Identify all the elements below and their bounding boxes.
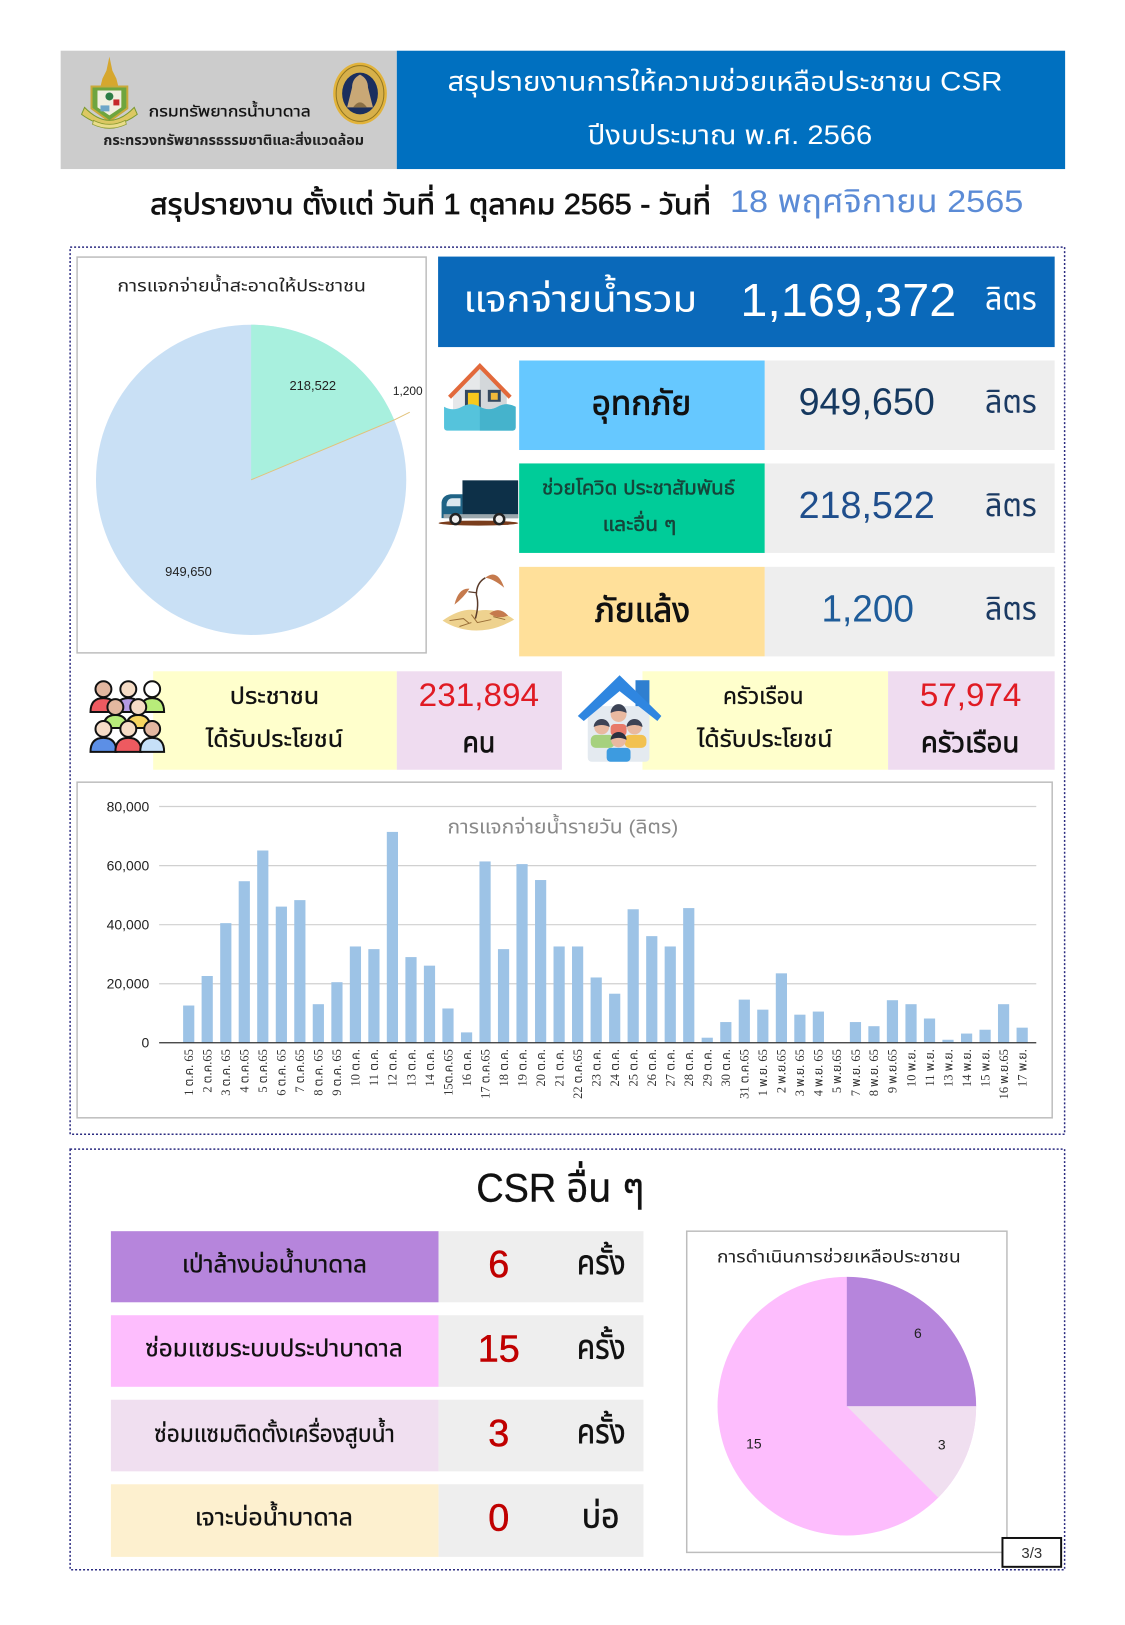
y axis grid and labels: 20,000	[107, 976, 149, 992]
table row: well flushing	[111, 1231, 643, 1302]
icon: dry plant on cracked soil	[443, 574, 514, 630]
header title panel: ปีงบประมาณ พ.ศ. 2566	[588, 120, 872, 150]
page number badge: 3/3	[1021, 1546, 1042, 1562]
row: flood: ลิตร	[985, 384, 1037, 420]
stat: people benefited: คน	[462, 727, 495, 759]
y axis grid and labels: 0	[141, 1035, 149, 1051]
row: covid and public relations: และอื่น ๆ	[603, 510, 676, 536]
report period subtitle: สรุปรายงาน ตั้งแต่ วันที่ 1 ตุลาคม 2565 - วันที่	[150, 184, 711, 221]
row: drought	[443, 567, 1055, 656]
x axis date labels: 22 ต.ค.65	[571, 1049, 585, 1099]
stat: people benefited: 231,894	[419, 676, 539, 713]
x axis date labels: 14 ต.ค.	[423, 1049, 437, 1086]
report period subtitle: 18 พฤศจิกายน 2565	[730, 183, 1023, 219]
row: drought: ภัยแล้ง	[595, 592, 690, 630]
y axis grid and labels	[107, 799, 1036, 1051]
x axis date labels: 17 ต.ค.65	[478, 1049, 492, 1099]
table row: groundwater supply repair	[111, 1315, 643, 1387]
heading: other CSR: CSR อื่น ๆ	[476, 1160, 644, 1210]
x axis date labels: 1 ต.ค. 65	[182, 1049, 196, 1096]
stat: people benefited: ได้รับประโยชน์	[205, 726, 343, 752]
y axis grid and labels: 60,000	[107, 858, 149, 874]
row: covid and public relations: ช่วยโควิด ประชาสัมพันธ์	[542, 476, 735, 499]
row: covid and public relations	[439, 463, 1055, 553]
x axis date labels: 3 ต.ค. 65	[219, 1049, 233, 1096]
y axis grid and labels: 40,000	[107, 917, 149, 933]
x axis date labels: 16 พ.ย.65	[997, 1049, 1011, 1099]
table row: pump repair and installation: 3	[488, 1413, 509, 1455]
table row: pump repair and installation: ครั้ง	[577, 1410, 626, 1451]
pie chart: assistance operations: 3	[938, 1436, 946, 1452]
table row: well drilling: บ่อ	[582, 1498, 620, 1536]
icon: group of people	[91, 681, 164, 752]
row: flood: 949,650	[799, 382, 935, 424]
x axis date labels: 18 ต.ค.	[497, 1049, 511, 1086]
stat: households benefited	[578, 671, 1055, 770]
pie chart: assistance operations: การดำเนินการช่วยเหลือประชาชน	[717, 1248, 961, 1267]
table row: groundwater supply repair: ซ่อมแซมระบบประปาบาดาล	[145, 1335, 403, 1362]
x axis date labels	[182, 1049, 1029, 1099]
page number badge	[1002, 1538, 1061, 1567]
panel: other CSR frame	[70, 1149, 1065, 1570]
x axis date labels: 6 ต.ค. 65	[275, 1049, 289, 1096]
row: flood: อุทกภัย	[592, 385, 691, 424]
x axis date labels: 5 พ.ย.65	[830, 1049, 844, 1093]
row: drought: ลิตร	[985, 591, 1037, 627]
panel: water distribution frame	[70, 247, 1065, 1134]
stat: people benefited	[91, 671, 562, 770]
x axis date labels: 7 พ.ย. 65	[849, 1049, 863, 1096]
x axis date labels: 12 ต.ค.	[386, 1049, 400, 1086]
department name: กรมทรัพยากรน้ำบาดาล	[149, 100, 311, 120]
header title panel: สรุปรายงานการให้ความช่วยเหลือประชาชน CSR	[448, 66, 1002, 97]
pie chart: assistance operations	[687, 1231, 1007, 1552]
x axis date labels: 8 พ.ย. 65	[867, 1049, 881, 1096]
x axis date labels: 27 ต.ค.	[664, 1049, 678, 1086]
header title panel	[397, 51, 1065, 169]
chart title: การแจกจ่ายน้ำรายวัน (ลิตร)	[448, 813, 678, 838]
table row: pump repair and installation	[111, 1400, 643, 1471]
x axis date labels: 10 ต.ค.	[349, 1049, 363, 1086]
pie chart: assistance operations: 6	[914, 1325, 922, 1341]
total water banner: ลิตร	[985, 280, 1037, 316]
x axis date labels: 24 ต.ค.	[608, 1049, 622, 1086]
pie chart: clean water distribution	[77, 257, 426, 653]
icon: department crest	[82, 57, 137, 128]
stat: households benefited: ได้รับประโยชน์	[696, 726, 832, 752]
header banner	[61, 51, 1065, 169]
x axis date labels: 29 ต.ค.	[701, 1049, 715, 1086]
x axis date labels: 31 ต.ค.65	[738, 1049, 752, 1099]
x axis date labels: 2 ต.ค.65	[200, 1049, 215, 1093]
x axis date labels: 30 ต.ค.	[719, 1049, 733, 1086]
x axis date labels: 13 ต.ค.	[404, 1049, 418, 1086]
row: covid and public relations: ลิตร	[985, 487, 1037, 523]
table row: groundwater supply repair: ครั้ง	[577, 1325, 626, 1366]
stat: households benefited: ครัวเรือน	[723, 683, 804, 709]
x axis date labels: 11 ต.ค.	[367, 1049, 381, 1086]
ministry name: กระทรวงทรัพยากรธรรมชาติและสิ่งแวดล้อม	[103, 131, 364, 148]
x axis date labels: 15ต.ค.65	[441, 1049, 455, 1096]
x axis date labels: 21 ต.ค.	[552, 1049, 566, 1086]
pie chart: clean water distribution: 1,200	[393, 384, 423, 398]
pie chart: assistance operations: 15	[746, 1435, 762, 1451]
x axis date labels: 26 ต.ค.	[645, 1049, 659, 1086]
total water banner	[438, 257, 1055, 347]
x axis date labels: 23 ต.ค.	[589, 1049, 604, 1086]
icon: family in a house	[578, 675, 661, 762]
x axis date labels: 13 พ.ย.	[941, 1049, 955, 1087]
total water banner: 1,169,372	[740, 274, 956, 326]
table row: well drilling: 0	[488, 1498, 509, 1540]
icon: ministry seal	[333, 63, 387, 124]
table row: pump repair and installation: ซ่อมแซมติดตั้งเครื่องสูบน้ำ	[154, 1417, 395, 1449]
x axis date labels: 9 พ.ย.65	[886, 1049, 900, 1093]
x axis date labels: 9 ต.ค. 65	[330, 1049, 344, 1096]
x axis date labels: 4 ต.ค.65	[238, 1049, 252, 1093]
x axis date labels: 19 ต.ค.	[515, 1049, 529, 1086]
x axis date labels: 17 พ.ย.	[1015, 1049, 1029, 1087]
bar chart: daily water distribution	[77, 782, 1052, 1118]
bars	[183, 832, 1028, 1043]
x axis date labels: 5 ต.ค.65	[256, 1049, 270, 1093]
x axis date labels: 3 พ.ย. 65	[793, 1049, 807, 1096]
stat: households benefited: 57,974	[920, 676, 1021, 713]
x axis date labels: 15 พ.ย.	[978, 1049, 992, 1087]
stat: people benefited: ประชาชน	[230, 683, 319, 709]
table row: well drilling: เจาะบ่อน้ำบาดาล	[195, 1501, 353, 1532]
pie chart: clean water distribution: การแจกจ่ายน้ำสะอาดให้ประชาชน	[117, 273, 366, 295]
x axis date labels: 1 พ.ย. 65	[756, 1049, 770, 1096]
x axis date labels: 8 ต.ค. 65	[312, 1049, 326, 1096]
x axis date labels: 11 พ.ย.	[923, 1049, 937, 1086]
x axis date labels: 14 พ.ย.	[960, 1049, 974, 1087]
table row: well flushing: 6	[488, 1244, 509, 1286]
x axis date labels: 20 ต.ค.	[534, 1049, 548, 1086]
x axis date labels: 28 ต.ค.	[682, 1049, 696, 1086]
header logo panel	[61, 51, 397, 169]
total water banner: แจกจ่ายน้ำรวม	[463, 273, 697, 319]
row: drought: 1,200	[821, 589, 914, 631]
report period subtitle	[150, 183, 1023, 221]
x axis line	[159, 1042, 1036, 1044]
icon: flooded house	[444, 363, 516, 431]
x axis date labels: 2 พ.ย.65	[775, 1049, 789, 1093]
table row: well flushing: ครั้ง	[577, 1241, 626, 1282]
x axis date labels: 4 พ.ย. 65	[812, 1049, 826, 1096]
x axis date labels: 10 พ.ย.	[904, 1049, 918, 1087]
pie chart: clean water distribution: 218,522	[289, 378, 336, 393]
x axis date labels: 25 ต.ค.	[626, 1049, 640, 1086]
x axis date labels: 16 ต.ค.	[460, 1049, 474, 1086]
table row: groundwater supply repair: 15	[478, 1328, 520, 1370]
x axis date labels: 7 ต.ค.65	[293, 1049, 307, 1093]
table row: well flushing: เป่าล้างบ่อน้ำบาดาล	[182, 1247, 367, 1278]
row: flood	[444, 361, 1055, 450]
icon: delivery truck	[439, 480, 518, 526]
y axis grid and labels: 80,000	[107, 799, 149, 815]
stat: households benefited: ครัวเรือน	[921, 727, 1019, 759]
row: covid and public relations: 218,522	[799, 485, 935, 527]
pie chart: clean water distribution: 949,650	[165, 564, 212, 579]
table row: well drilling	[111, 1484, 643, 1557]
